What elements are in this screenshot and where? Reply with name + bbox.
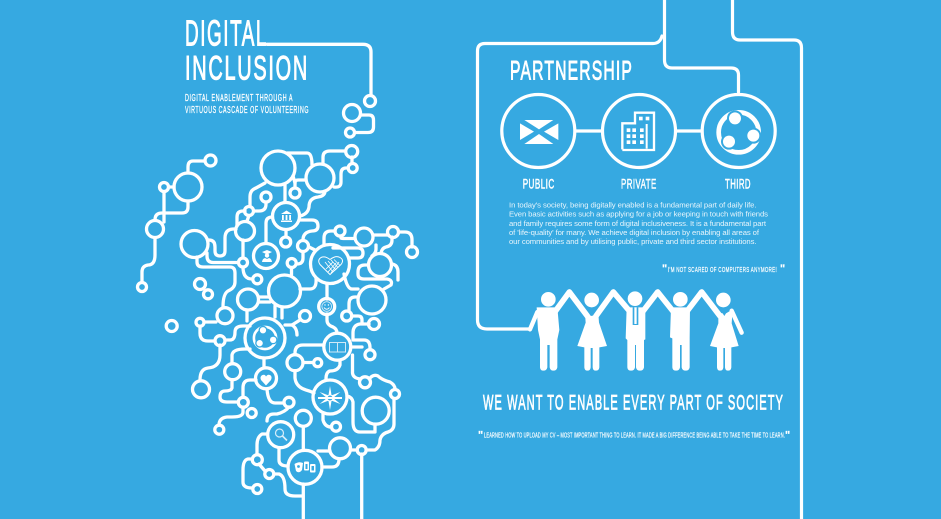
body text: our communities and by utilising public, private and third sector institutions. (509, 237, 756, 246)
partnership labels: PRIVATE (621, 176, 657, 192)
partnership labels: PUBLIC (523, 176, 555, 192)
man two with tie (626, 291, 645, 371)
people holding hands (530, 291, 742, 371)
quote: learned to upload cv (478, 430, 790, 442)
body text (509, 200, 768, 246)
icon: star petals (318, 386, 342, 410)
title: DIGITAL (185, 12, 268, 54)
body text: Even basic activities such as applying for a job or keeping in touch with friends (509, 210, 768, 219)
quote: not scared of computers (662, 263, 785, 275)
subtitle: DIGITAL ENABLEMENT THROUGH A (185, 93, 293, 104)
quote: learned to upload cv: " (785, 430, 790, 442)
title: INCLUSION (185, 50, 309, 88)
icon: saltire flag (520, 120, 558, 144)
quote: not scared of computers: " (662, 263, 667, 275)
icon: bank (281, 210, 292, 222)
icon: third sector people ring (719, 110, 761, 152)
subtitle (185, 93, 309, 116)
icon: globe of people (254, 326, 278, 349)
body text: of 'life-quality' for many. We achieve digital inclusion by enabling all areas of (509, 228, 760, 237)
partnership labels (523, 176, 751, 192)
heading: partnership: PARTNERSHIP (510, 56, 633, 86)
icon: clasped hearts (319, 257, 343, 274)
icon: book (330, 342, 346, 352)
woman one (577, 293, 607, 371)
partnership diagram (502, 94, 775, 168)
quote: not scared of computers: " (780, 263, 785, 275)
man one (530, 292, 559, 371)
network map of Scotland (138, 44, 418, 519)
body text: In today's society, being digitally enabled is a fundamental part of daily life. (509, 200, 756, 210)
icon: heart (260, 375, 272, 386)
subtitle: VIRTUOUS CASCADE OF VOLUNTEERING (185, 105, 309, 116)
title (185, 12, 309, 88)
icon: smiley (322, 302, 332, 311)
quote: learned to upload cv: " (478, 430, 483, 442)
icon: graduate (262, 250, 272, 262)
quote: not scared of computers: I'M NOT SCARED OF COMPUTERS ANYMORE! (668, 265, 777, 274)
icon: theatre masks (294, 462, 316, 472)
partnership labels: THIRD (725, 176, 751, 192)
body text: and family requires some form of digital inclusiveness. It is a fundamental part (509, 219, 767, 228)
panel outline: partnership frame (478, 0, 802, 519)
woman two (710, 293, 742, 371)
man three (670, 292, 690, 371)
icon: magnifier (276, 429, 287, 440)
raised arms (555, 292, 720, 316)
icon: office buildings (622, 113, 654, 150)
